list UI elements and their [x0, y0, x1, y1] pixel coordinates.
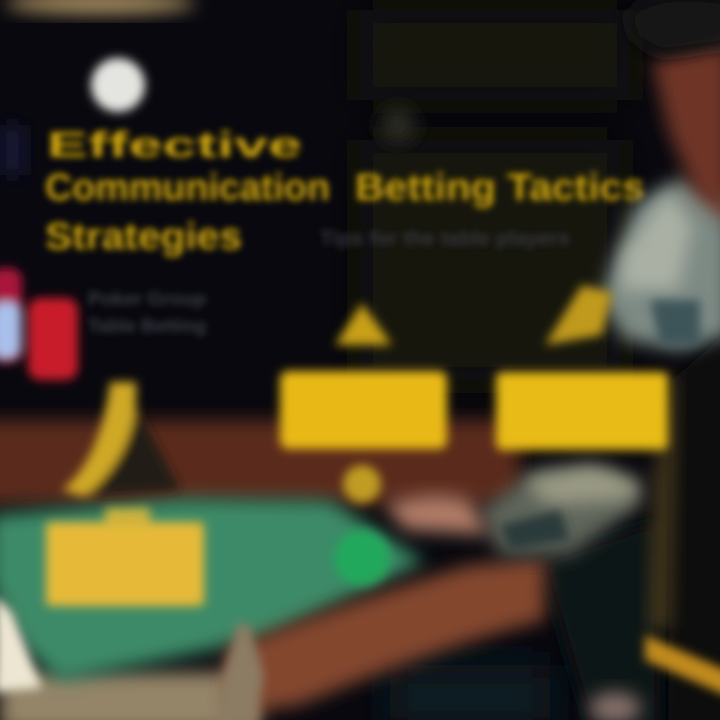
person: shirt — [600, 178, 720, 350]
hand on table edge — [215, 622, 264, 720]
logo caption: Poker Group — [88, 289, 206, 309]
faint background circle — [380, 107, 416, 143]
title — [45, 124, 645, 258]
person: arm — [225, 558, 545, 715]
green chip — [334, 530, 390, 586]
title: Effective — [47, 124, 302, 165]
person: head — [625, 0, 720, 225]
title: Betting Tactics — [355, 167, 645, 209]
icon: center yellow symbol — [335, 303, 392, 345]
logo caption: Table Betting — [88, 316, 206, 336]
logo — [0, 268, 78, 380]
yellow box: left — [46, 508, 204, 606]
ceiling light streak — [5, 0, 195, 14]
person: lower body dark — [540, 330, 720, 720]
white circle icon — [91, 58, 145, 112]
title: Communication — [45, 167, 330, 209]
icon: right yellow symbol — [545, 285, 612, 345]
white table corner — [0, 595, 42, 692]
subtitle: Tips for the table players — [320, 228, 570, 250]
green card table — [0, 498, 425, 682]
title: Strategies — [45, 216, 242, 258]
icon: triangle with banana shape — [62, 382, 180, 497]
gold cuff stripe — [645, 635, 720, 697]
yellow box: center — [280, 371, 447, 449]
hand — [385, 495, 490, 535]
logo caption — [88, 289, 206, 336]
yellow box: right — [496, 372, 668, 450]
icon: small yellow symbol below center box — [343, 465, 381, 503]
person: striped sleeve — [480, 465, 640, 555]
lower right highlight — [589, 692, 641, 720]
